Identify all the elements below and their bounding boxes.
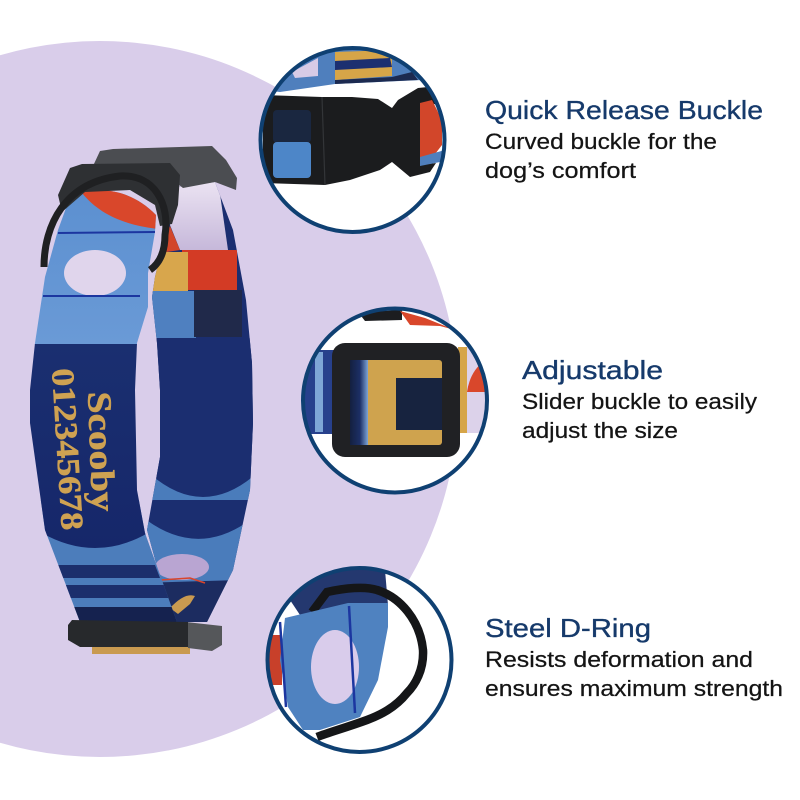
inset: quick release buckle xyxy=(260,45,445,232)
description line 2: adjust the size xyxy=(522,418,678,443)
red arc on strap xyxy=(82,191,156,229)
left strap xyxy=(305,350,334,434)
heading: Steel D-Ring xyxy=(485,613,651,643)
navy stripes xyxy=(50,565,160,578)
engraved name text: Scooby xyxy=(80,391,121,512)
top strap sliver xyxy=(362,310,402,321)
description line 1: Slider buckle to easily xyxy=(522,389,758,414)
lavender dot xyxy=(311,630,359,704)
heading: Adjustable xyxy=(522,355,663,385)
red edge xyxy=(270,635,282,685)
inset: adjustable slider xyxy=(300,308,490,492)
slider frame xyxy=(332,343,460,457)
dark strap in window xyxy=(396,378,442,430)
front strap of the collar xyxy=(30,191,177,622)
description line 2: dog’s comfort xyxy=(485,158,637,183)
mid blue lower section xyxy=(40,500,177,622)
tan strap end xyxy=(92,643,190,654)
text block: adjustable xyxy=(522,355,758,443)
blue fabric tab xyxy=(280,603,388,730)
bottom buckle xyxy=(68,620,222,654)
inset ring: slider xyxy=(303,308,487,492)
engraved phone text: 012345678 xyxy=(45,367,91,531)
description line 1: Curved buckle for the xyxy=(485,129,717,154)
text block: quick release buckle xyxy=(485,95,763,183)
lavender dot on strap xyxy=(64,250,126,296)
stitches xyxy=(280,606,355,713)
top buckle back part xyxy=(93,146,237,190)
background lavender circle xyxy=(0,41,458,757)
buckle body xyxy=(263,87,445,185)
navy strap section xyxy=(30,344,146,548)
buckle seam xyxy=(322,97,325,185)
back strap of the collar xyxy=(147,182,253,622)
slider window xyxy=(368,360,442,445)
heading: Quick Release Buckle xyxy=(485,95,763,125)
stitch lines xyxy=(43,232,155,296)
top buckle front part xyxy=(58,163,180,226)
right strap xyxy=(467,347,485,433)
D-ring xyxy=(44,176,166,270)
red strap piece xyxy=(420,100,442,158)
inset: steel D-ring xyxy=(270,570,428,741)
collar illustration xyxy=(20,146,260,654)
upper strap xyxy=(276,50,420,92)
inset ring: buckle xyxy=(260,48,444,232)
text block: steel D-ring xyxy=(485,613,783,701)
inset ring: D-ring xyxy=(268,568,452,752)
description line 1: Resists deformation and xyxy=(485,647,753,672)
window strap xyxy=(273,110,311,143)
description line 2: ensures maximum strength xyxy=(485,676,783,701)
D-ring metal xyxy=(312,588,423,737)
top pattern xyxy=(290,570,388,615)
